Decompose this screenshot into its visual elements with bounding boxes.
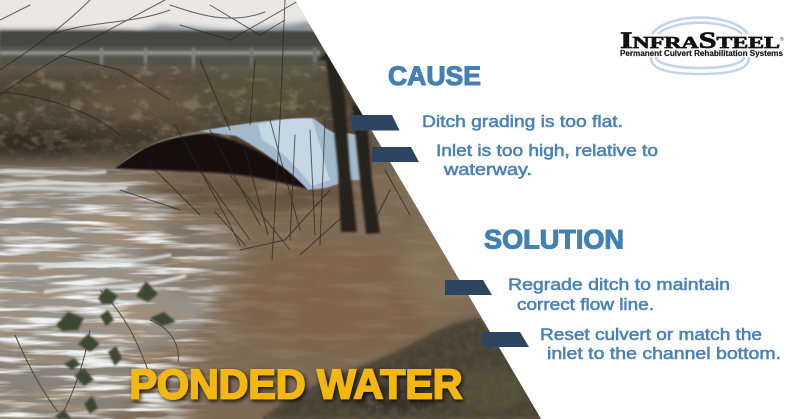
text: cause list: waterway. [443, 161, 532, 179]
culvert opening [115, 133, 312, 190]
logo registered mark: ® [780, 36, 784, 43]
heading: solution: SOLUTION [484, 224, 624, 254]
sky [0, 0, 320, 38]
title: ponded water: PONDED WATER [130, 360, 463, 408]
logo tagline: Permanent Culvert Rehabilitation Systems [620, 49, 784, 58]
logo: InfraSteel [620, 18, 784, 74]
bare branches [0, 0, 410, 260]
text: cause list [422, 113, 658, 179]
photo: flooded culvert [0, 0, 560, 419]
brush hillside [0, 70, 370, 162]
water ripple texture [0, 165, 252, 419]
text: solution list [508, 276, 781, 363]
text: cause list: Inlet is too high, relative to [436, 142, 658, 160]
bullet bars: solution [445, 280, 529, 347]
stream bank [262, 318, 560, 419]
text: cause list: Ditch grading is too flat. [422, 113, 623, 131]
tree trunks [318, 50, 380, 234]
brown water texture [150, 176, 444, 374]
text: solution list: Reset culvert or match the [540, 326, 762, 344]
culvert steel [113, 118, 362, 190]
text: solution list: Regrade ditch to maintain [508, 276, 730, 294]
logo wordmark: INFRA S TEEL [620, 28, 780, 53]
logo ring [651, 18, 749, 74]
tree line and road rail [0, 31, 330, 74]
heading: cause: CAUSE [388, 61, 481, 91]
bright ripples [0, 171, 185, 292]
bullet bars: cause [352, 115, 419, 162]
text: solution list: inlet to the channel bottom. [547, 345, 781, 363]
flood water [0, 168, 560, 419]
text: solution list: correct flow line. [517, 296, 654, 314]
brush texture [0, 62, 400, 162]
bank texture [262, 318, 540, 419]
foreground plant [15, 281, 178, 419]
